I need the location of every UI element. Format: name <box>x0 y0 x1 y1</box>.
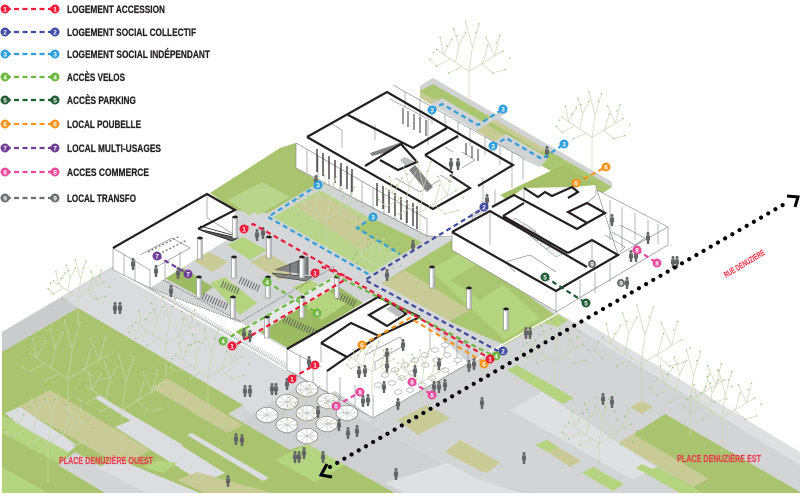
route 7: local multi-usages: 7 <box>186 272 190 278</box>
legend row: accès commerce: 8 <box>3 170 7 176</box>
legend row: accès vélos: ACCÈS VELOS <box>67 71 125 84</box>
legend row: local multi-usages: 7 <box>3 146 7 152</box>
legend row: logement social indépendant: LOGEMENT SOCIAL INDÉPENDANT <box>67 48 210 61</box>
legend row: logement accession: 1 <box>3 6 7 14</box>
legend row: local poubelle: 6 <box>53 122 57 128</box>
people <box>113 146 679 487</box>
legend row: local multi-usages: 7 <box>53 146 57 152</box>
route 8: accès commerce: 8 <box>430 392 434 400</box>
route 2: logement social collectif: 2 <box>482 204 486 212</box>
route 9: local transfo: 9 <box>619 280 623 288</box>
route 5: accès parking <box>540 272 590 308</box>
route 1: logement accession: 1 <box>313 270 317 278</box>
legend row: logement social collectif <box>0 27 196 39</box>
legend row: logement social indépendant <box>0 48 210 61</box>
route 5: accès parking: 5 <box>584 300 588 308</box>
legend row: logement accession: 1 <box>53 6 57 14</box>
ground plane <box>2 266 800 493</box>
route 1: logement accession: 1 <box>488 356 492 364</box>
legend row: accès commerce <box>0 167 149 179</box>
route 4: accès vélos: 4 <box>315 310 319 318</box>
legend row: local transfo <box>0 193 136 205</box>
route 6: local poubelle: 6 <box>360 342 364 350</box>
route 5: accès parking: 5 <box>543 274 547 282</box>
route 3: logement social indépendant: 3 <box>430 108 434 114</box>
bottom margin <box>0 493 800 496</box>
legend row: logement social indépendant: 3 <box>53 52 57 58</box>
label: place Denuzière est: PLACE DENUZIÈRE EST <box>677 452 761 465</box>
route 6: local poubelle: 6 <box>574 180 578 188</box>
route 1: logement accession: 1 <box>230 344 234 350</box>
west building <box>113 194 238 288</box>
restaurant tables <box>374 343 462 394</box>
route 8: accès commerce: 8 <box>334 404 338 410</box>
legend row: local transfo: 9 <box>53 196 57 202</box>
courtyard stair <box>272 257 312 281</box>
route 1: logement accession: 1 <box>242 226 246 234</box>
legend row: accès parking <box>0 94 136 107</box>
route 1: logement accession: 1 <box>290 376 294 384</box>
legend row: accès commerce: 8 <box>53 170 57 176</box>
route 8: accès commerce: 8 <box>635 248 639 254</box>
route 7: local multi-usages <box>152 252 192 278</box>
legend row: local multi-usages: LOCAL MULTI-USAGES <box>67 143 161 155</box>
route 4: accès vélos <box>218 275 500 360</box>
route 6: local poubelle: 6 <box>482 362 486 368</box>
route 8: accès commerce: 8 <box>358 390 362 396</box>
east building <box>452 185 668 312</box>
legend row: logement accession: LOGEMENT ACCESSION <box>67 4 165 16</box>
courtyard columns <box>196 216 509 338</box>
route 3: logement social indépendant: 3 <box>371 214 375 222</box>
legend row: logement social collectif: LOGEMENT SOCIAL COLLECTIF <box>67 27 196 39</box>
legend row: local poubelle: LOCAL POUBELLE <box>67 119 141 131</box>
route 3: logement social indépendant: 3 <box>562 142 566 148</box>
legend row: local poubelle: 6 <box>3 122 7 128</box>
route 3: logement social indépendant <box>268 104 568 275</box>
north site wall and roof terrace <box>420 78 612 215</box>
route 3: logement social indépendant: 3 <box>316 182 320 190</box>
route 8: accès commerce: 8 <box>655 260 659 268</box>
route 9: local transfo: 9 <box>590 262 594 268</box>
route 3: logement social indépendant: 3 <box>491 144 495 150</box>
main housing building <box>296 85 523 240</box>
route 4: accès vélos: 4 <box>494 354 498 360</box>
legend row: logement accession <box>0 4 165 16</box>
route 2: logement social collectif: 2 <box>501 348 505 356</box>
legend row: accès vélos: 4 <box>53 74 57 82</box>
dotted arrow: rue Denuzière <box>321 196 798 477</box>
legend row: accès parking: ACCÈS PARKING <box>67 94 136 107</box>
legend row: local transfo: 9 <box>3 196 7 202</box>
legend row: local transfo: LOCAL TRANSFO <box>67 193 136 205</box>
route 1: logement accession: 1 <box>313 362 317 370</box>
route 8: accès commerce: 8 <box>410 380 414 386</box>
route 2: logement social collectif <box>365 202 508 356</box>
legend row: logement social indépendant: 3 <box>3 52 7 58</box>
legend row: accès vélos: 4 <box>3 74 7 82</box>
legend row: logement social collectif: 2 <box>53 30 57 36</box>
legend row: accès commerce: ACCES COMMERCE <box>67 167 149 179</box>
bicycle parking rows <box>203 280 355 334</box>
route 3: logement social indépendant: 3 <box>501 106 505 114</box>
route 7: local multi-usages: 7 <box>155 254 159 260</box>
legend row: local multi-usages <box>0 143 161 155</box>
route 9: local transfo <box>588 260 625 288</box>
legend row: accès vélos <box>0 71 125 84</box>
place Denuzière ouest lawn <box>2 308 395 493</box>
route 4: accès vélos: 4 <box>265 280 269 286</box>
route 4: accès vélos: 4 <box>221 338 225 346</box>
label: rue Denuzière: RUE DENUZIERE <box>722 247 767 280</box>
legend row: logement social collectif: 2 <box>3 30 7 36</box>
route 1: logement accession <box>228 224 494 384</box>
central courtyard planes <box>113 143 557 370</box>
south commerce building <box>287 297 468 418</box>
place Denuzière est lawns <box>397 313 800 493</box>
legend row: local poubelle <box>0 119 141 131</box>
label: place Denuzière ouest: PLACE DENUZIÈRE OUEST <box>59 454 153 467</box>
legend row: accès parking: 5 <box>53 98 57 104</box>
route 8: accès commerce <box>332 246 662 410</box>
route 6: local poubelle: 6 <box>604 164 608 172</box>
terrace umbrellas <box>256 382 358 444</box>
legend row: accès parking: 5 <box>3 98 7 104</box>
legend <box>0 4 210 205</box>
route 6: local poubelle <box>358 162 610 368</box>
